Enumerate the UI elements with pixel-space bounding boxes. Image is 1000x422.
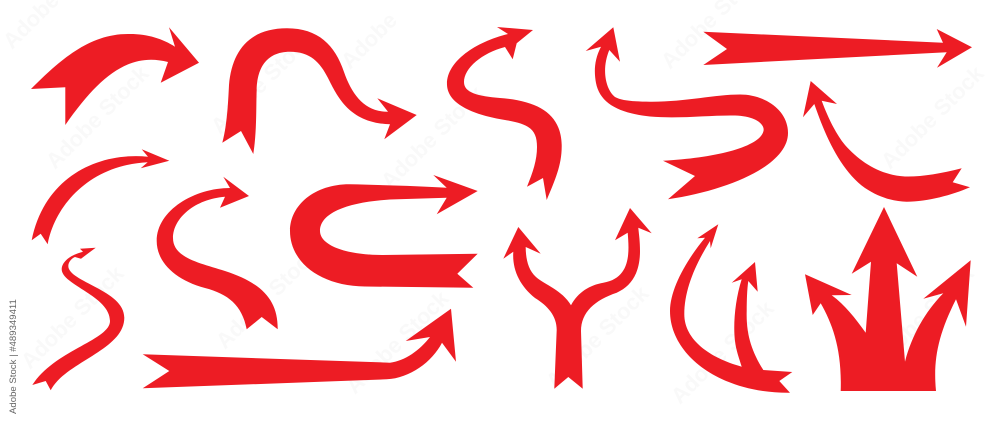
arrow: S ribbon middle <box>157 177 278 329</box>
arrow: long bottom rising <box>143 309 456 388</box>
text: Adobe Stock <box>206 25 319 139</box>
text: Adobe Stock <box>876 60 989 174</box>
arrow: trident <box>805 207 971 391</box>
arrow: thin arc left <box>32 149 169 244</box>
arrow: straight top right <box>703 29 972 68</box>
vertical stock id text: Adobe Stock | #489349411 <box>8 299 19 414</box>
arrow: Y fork <box>503 208 652 389</box>
text: Adobe Stock <box>16 260 129 374</box>
text: Adobe Stock <box>866 260 979 374</box>
text: Adobe Stock <box>41 60 154 174</box>
arrow: small S bottom left <box>32 248 124 390</box>
arrow: wide arc top left <box>31 27 199 125</box>
arrow: hump to right <box>222 28 417 154</box>
text: Adobe <box>336 7 402 74</box>
arrow: curve up left <box>803 81 970 202</box>
text: Adobe Stock <box>376 80 489 194</box>
text: Adobe Stock <box>541 280 654 394</box>
arrow: double curved branch <box>670 224 792 393</box>
arrow: long S up left <box>586 27 788 199</box>
text: Adobe Stock <box>211 240 324 354</box>
text: Adobe Stock <box>341 285 454 399</box>
arrow: S curve up right <box>447 27 562 200</box>
arrow: wide U right <box>290 175 478 288</box>
text: Adobe Stock <box>666 295 779 409</box>
